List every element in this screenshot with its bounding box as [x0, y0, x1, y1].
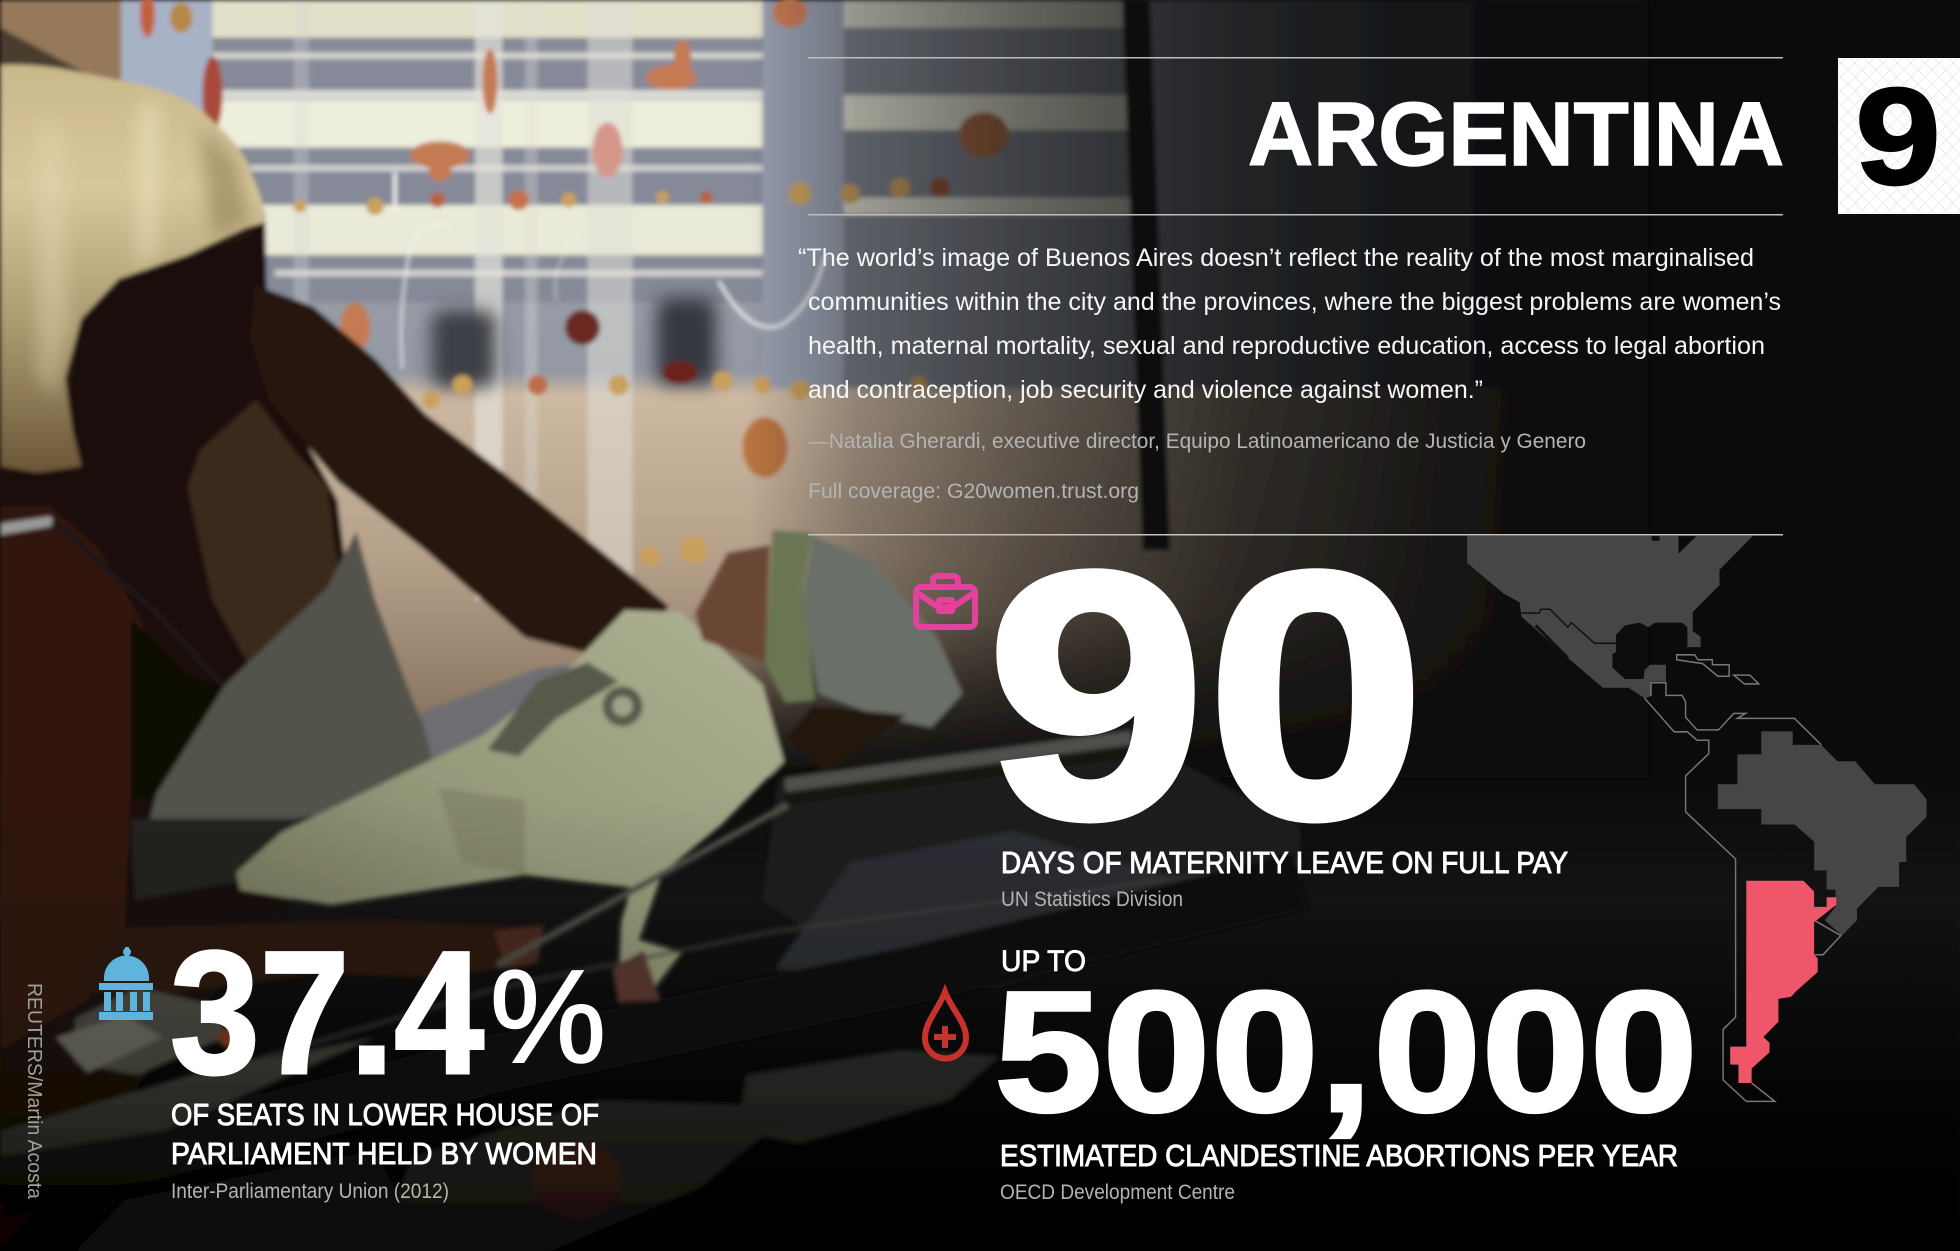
- icon: blood drop with cross: [925, 992, 966, 1058]
- statistic: 37.4% seats in parliament: [170, 916, 606, 1203]
- icon: briefcase: [916, 576, 975, 627]
- quote text: and contraception, job security and violence against women.”: [808, 376, 1483, 404]
- photo credit: REUTERS/Martin Acosta: [23, 983, 45, 1200]
- quote text: health, maternal mortality, sexual and reproductive education, access to legal abortion: [808, 332, 1765, 360]
- quote attribution: —Natalia Gherardi, executive director, Equipo Latinoamericano de Justicia y Genero: [808, 430, 1586, 453]
- rank badge: 9: 9: [1855, 60, 1941, 214]
- icon: parliament building: [99, 947, 153, 1020]
- statistic: up to 500,000 abortions: UP TO: [1001, 945, 1086, 978]
- rank badge: 9: [1838, 58, 1960, 214]
- rule below title: [808, 214, 1783, 216]
- full coverage link: Full coverage: G20women.trust.org: [808, 480, 1139, 503]
- statistic: 90 days of maternity leave: [986, 498, 1568, 911]
- statistic: up to 500,000 abortions: ESTIMATED CLANDESTINE ABORTIONS PER YEAR: [1000, 1138, 1678, 1173]
- statistic: up to 500,000 abortions: 500,000: [994, 956, 1698, 1148]
- statistic: 90 days of maternity leave: DAYS OF MATERNITY LEAVE ON FULL PAY: [1001, 845, 1568, 880]
- statistic: 37.4% seats in parliament: PARLIAMENT HELD BY WOMEN: [171, 1136, 597, 1171]
- quote text: “The world’s image of Buenos Aires doesn’t reflect the reality of the most marginalised: [798, 244, 1754, 272]
- statistic: 37.4% seats in parliament: %: [490, 943, 606, 1090]
- statistic: up to 500,000 abortions: [994, 945, 1698, 1204]
- statistic: 37.4% seats in parliament: Inter-Parliamentary Union (2012): [171, 1180, 449, 1203]
- rule above statistics: [808, 534, 1783, 536]
- statistic: 90 days of maternity leave: UN Statistics Division: [1001, 888, 1183, 911]
- statistic: 37.4% seats in parliament: OF SEATS IN LOWER HOUSE OF: [171, 1097, 599, 1132]
- map: Americas with Argentina highlighted: [1467, 535, 1927, 1101]
- title: Argentina: ARGENTINA: [1248, 85, 1784, 185]
- quote text: [798, 244, 1781, 404]
- quote text: communities within the city and the provinces, where the biggest problems are women’s: [808, 288, 1781, 316]
- statistic: 37.4% seats in parliament: 37.4: [170, 916, 484, 1111]
- statistic: up to 500,000 abortions: OECD Development Centre: [1000, 1181, 1235, 1204]
- rule under top of header: [808, 57, 1783, 58]
- statistic: 90 days of maternity leave: 90: [986, 498, 1426, 892]
